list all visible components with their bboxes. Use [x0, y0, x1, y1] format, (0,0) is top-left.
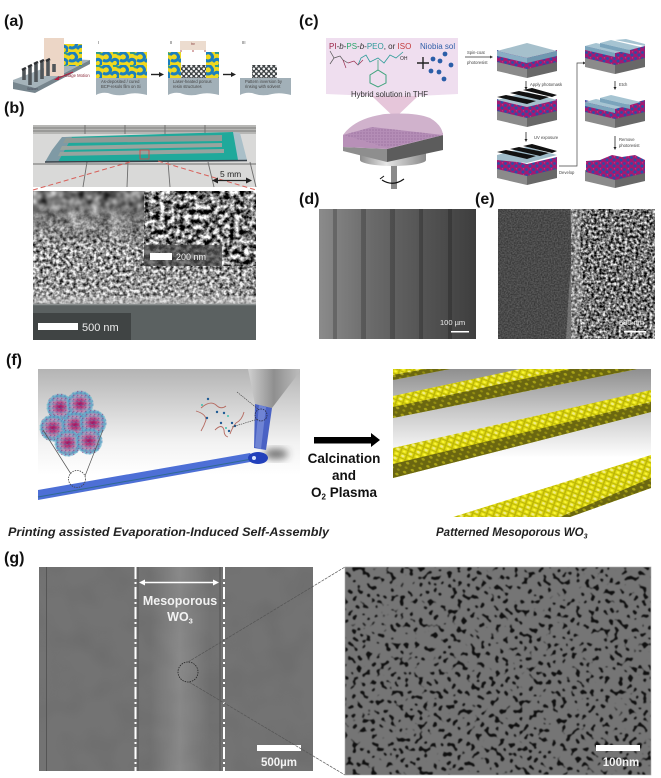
- block 4: developed: [585, 39, 645, 74]
- panel f: patterned WO3 render: [393, 369, 651, 517]
- label Mesoporous WO3: [143, 594, 217, 626]
- top stripe: [393, 369, 450, 380]
- label spin-coat photoresist: [465, 50, 493, 65]
- step III: III: [242, 40, 246, 45]
- panel b: device photograph: [33, 125, 256, 190]
- panel d: striped micrograph: [319, 209, 476, 339]
- width arrow: [139, 580, 219, 586]
- arrow caption: O: [311, 485, 322, 500]
- step remove photoresist: [614, 136, 640, 150]
- step remove photoresist: Remove: [619, 137, 635, 142]
- step remove photoresist: photoresist: [619, 143, 640, 148]
- block 1: photoresist film: [497, 43, 557, 78]
- caption: patterned WO3: Patterned Mesoporous WO: [436, 527, 584, 539]
- scale bar 100 nm: 100nm: [603, 757, 639, 769]
- label Mesoporous WO3: 3: [189, 616, 193, 626]
- bottom stripe: [453, 455, 651, 517]
- stage with pillars and laser: [13, 38, 90, 93]
- red selection box and zoom lines: [140, 150, 149, 159]
- scale bar 100 um: 100 µm: [440, 318, 465, 327]
- scale 5 mm: [212, 169, 252, 184]
- caption: printing: Printing assisted Evaporation-Induced Self-Assembly: [8, 527, 330, 539]
- arrow II to III: [223, 72, 236, 77]
- label spin-coat photoresist: photoresist: [467, 60, 488, 65]
- step I: I: [98, 40, 99, 45]
- spin coater: [343, 114, 443, 189]
- step II: resin structures: [173, 84, 202, 89]
- caption: patterned WO3: 3: [584, 534, 588, 540]
- stage with pillars and laser: Silicon: [27, 87, 38, 91]
- label Mesoporous WO3: WO: [167, 610, 189, 624]
- magnified region circle: [178, 662, 198, 682]
- label spin-coat photoresist: Spin-coat: [467, 50, 486, 55]
- panel c: spin coating of hybrid solution: [326, 38, 458, 189]
- dash-dot boundaries: [136, 567, 224, 771]
- label (g): (g): [4, 550, 24, 567]
- arrow caption: 2: [322, 492, 327, 502]
- panel e: edge micrograph: [498, 209, 655, 339]
- block 5: etched: [585, 95, 645, 128]
- step UV exposure: UV exposure: [534, 135, 559, 140]
- solution callout: OH: [400, 56, 408, 62]
- scale bar 500 um: [257, 745, 301, 769]
- third stripe: [393, 390, 651, 478]
- scale bar 500 nm: [619, 318, 646, 332]
- arrow caption: Calcination: [308, 451, 380, 466]
- panel a: laser patterning schematic: [13, 38, 291, 95]
- step III: rinsing with solvent: [245, 84, 281, 89]
- block 2: photomask: [497, 88, 557, 127]
- arrow I to II: [151, 72, 164, 77]
- step I: As-deposited / cured: [101, 79, 140, 84]
- scale 5 mm: 5 mm: [220, 169, 241, 179]
- develop arrow: [559, 62, 586, 175]
- solution callout: Niobia sol: [420, 42, 455, 51]
- micelle cluster callout: [40, 390, 106, 488]
- arrow caption: and: [332, 468, 356, 483]
- label (f): (f): [6, 352, 22, 369]
- scale bar 500 nm: 500 nm: [619, 318, 644, 327]
- step I: [96, 40, 147, 95]
- step II: [168, 40, 219, 95]
- inset SEM: [144, 191, 256, 266]
- step II: hv: [191, 42, 195, 46]
- develop arrow: Develop: [559, 170, 575, 175]
- label (e): (e): [475, 191, 495, 208]
- printed blue line: [38, 449, 288, 500]
- arrow caption: [308, 451, 380, 502]
- step UV exposure: [524, 132, 559, 142]
- panel g: optical micrograph: [39, 567, 313, 771]
- arrow caption: Plasma: [326, 485, 377, 500]
- step II: Laser-heated porous: [173, 79, 212, 84]
- panel g: mesoporous SEM: [345, 567, 651, 775]
- step III: Pattern inversion by: [245, 79, 283, 84]
- step III: [240, 40, 291, 95]
- process arrow: [314, 433, 380, 447]
- second stripe: [393, 369, 637, 418]
- scale bar 100 nm: [596, 745, 640, 769]
- niobia particles: [429, 52, 453, 81]
- scale bar 500 nm: 500 nm: [82, 322, 119, 334]
- scale bar 200 nm: 200 nm: [176, 252, 206, 262]
- block 3: UV exposed: [497, 144, 557, 185]
- zoom connector lines: [188, 567, 345, 775]
- scale bar 500 um: 500µm: [261, 757, 297, 769]
- step apply photomask: [524, 81, 563, 90]
- label (a): (a): [4, 13, 24, 30]
- step II: II: [170, 40, 172, 45]
- step I: BCP-resols film on Si: [101, 84, 141, 89]
- coated substrate: [45, 132, 247, 162]
- solution callout: [326, 38, 458, 118]
- stage with pillars and laser: Stage Motion: [65, 73, 90, 78]
- scale bar 500 nm: [33, 313, 131, 340]
- nozzle: [248, 369, 300, 450]
- block 6: patterned film: [585, 155, 645, 188]
- step apply photomask: Apply photomask: [530, 82, 563, 87]
- solution callout: Hybrid solution in THF: [351, 90, 428, 99]
- label (d): (d): [299, 191, 319, 208]
- label (b): (b): [4, 100, 24, 117]
- step etch: Etch: [619, 82, 628, 87]
- label (c): (c): [299, 13, 319, 30]
- panel b: SEM cross-section: [33, 191, 256, 340]
- solution molecules callout: [196, 392, 258, 437]
- label Mesoporous WO3: Mesoporous: [143, 594, 217, 608]
- step etch: [614, 81, 628, 90]
- polymer formula: PI-b-PS-b-PEO, or ISO: [329, 42, 411, 51]
- panel f: direct ink printing render: [38, 369, 300, 516]
- panel c: photolithography process: [465, 39, 645, 188]
- scale bar 100 um: [440, 318, 469, 332]
